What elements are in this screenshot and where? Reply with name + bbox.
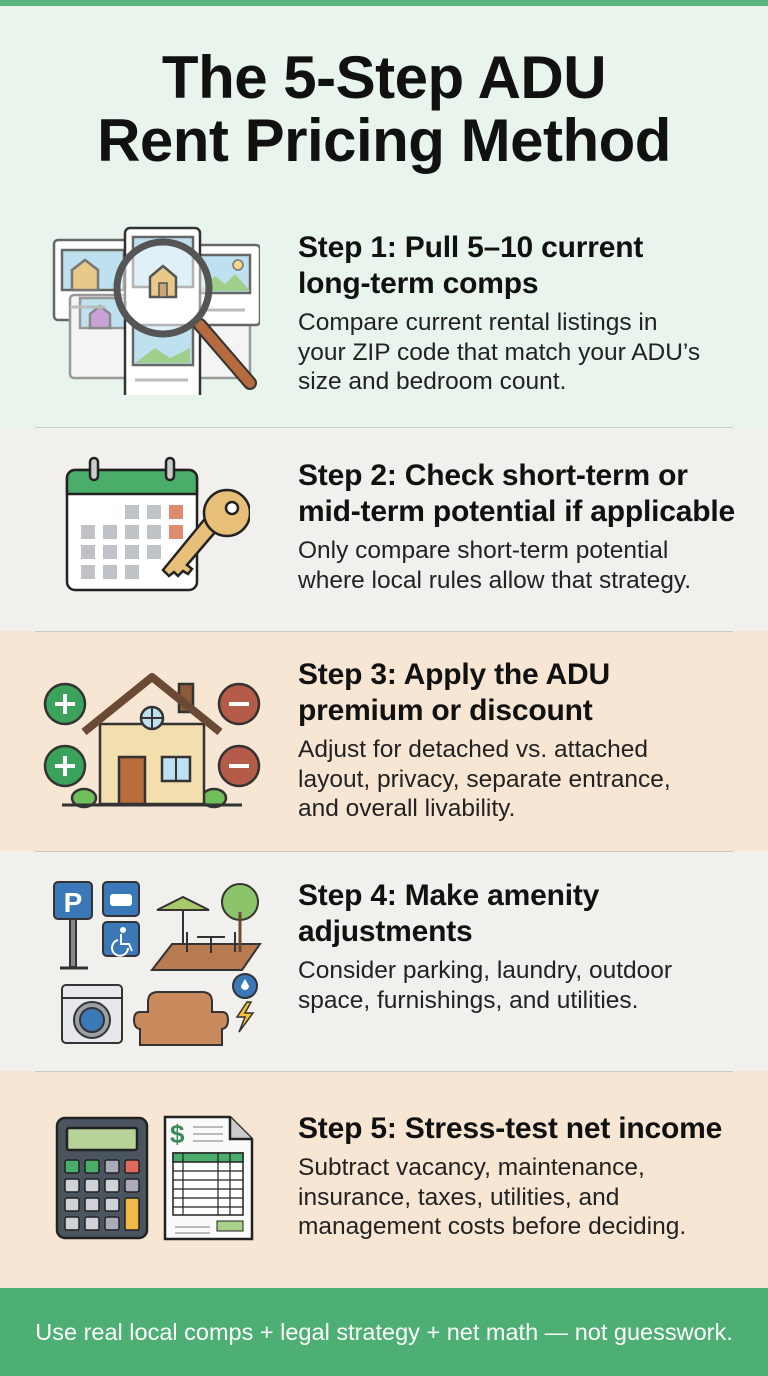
icon: amenities: P [64,887,82,918]
step 3 text: Adjust for detached vs. attached [298,736,648,763]
step 1 text: your ZIP code that match your ADU’s [298,338,700,366]
step 2 text: mid-term potential if applicable [298,495,735,528]
title: The 5-Step ADU [162,44,606,111]
step 3 text [298,658,671,822]
icon: amenities [53,881,262,1046]
step 4 text: Consider parking, laundry, outdoor [298,957,672,984]
background: header and step 1 [0,6,768,427]
step 4 text: space, furnishings, and utilities. [298,986,638,1014]
icon: house with plus/minus [44,673,260,808]
footer banner: Use real local comps + legal strategy + net math — not guesswork. [35,1319,733,1345]
icon: listings with magnifier [52,226,260,395]
background: step 3 [0,631,768,851]
icon: calculator and spreadsheet [56,1116,254,1240]
step 5 text: Subtract vacancy, maintenance, [298,1154,645,1181]
step 3 text: layout, privacy, separate entrance, [298,766,671,792]
step 4 text: Step 4: Make amenity [298,879,599,912]
background: step 2 [0,427,768,631]
top accent bar [0,0,768,6]
step 2 text: where local rules allow that strategy. [298,566,691,594]
step 2 text: Step 2: Check short-term or [298,459,688,492]
step 4 text [298,879,672,1014]
step 5 text: insurance, taxes, utilities, and [298,1184,619,1210]
icon: calendar with key [66,456,250,592]
step 5 text [298,1112,722,1240]
title: Rent Pricing Method [97,107,671,174]
title [97,44,671,174]
step 1 text: long-term comps [298,267,538,300]
step 3 text: premium or discount [298,694,593,727]
footer banner [0,1288,768,1376]
step 3 text: and overall livability. [298,795,515,822]
step 4 text: adjustments [298,915,473,948]
step 2 text [298,459,735,594]
background: step 4 [0,851,768,1071]
step 1 text: size and bedroom count. [298,368,566,395]
step 1 text: Step 1: Pull 5–10 current [298,231,643,264]
icon: calculator and spreadsheet: $ [170,1119,185,1149]
step 1 text [298,231,700,395]
step 5 text: management costs before deciding. [298,1213,686,1240]
step 3 text: Step 3: Apply the ADU [298,658,610,691]
step 5 text: Step 5: Stress-test net income [298,1112,722,1145]
background: step 5 [0,1071,768,1288]
step 2 text: Only compare short-term potential [298,537,668,564]
step 1 text: Compare current rental listings in [298,309,658,336]
